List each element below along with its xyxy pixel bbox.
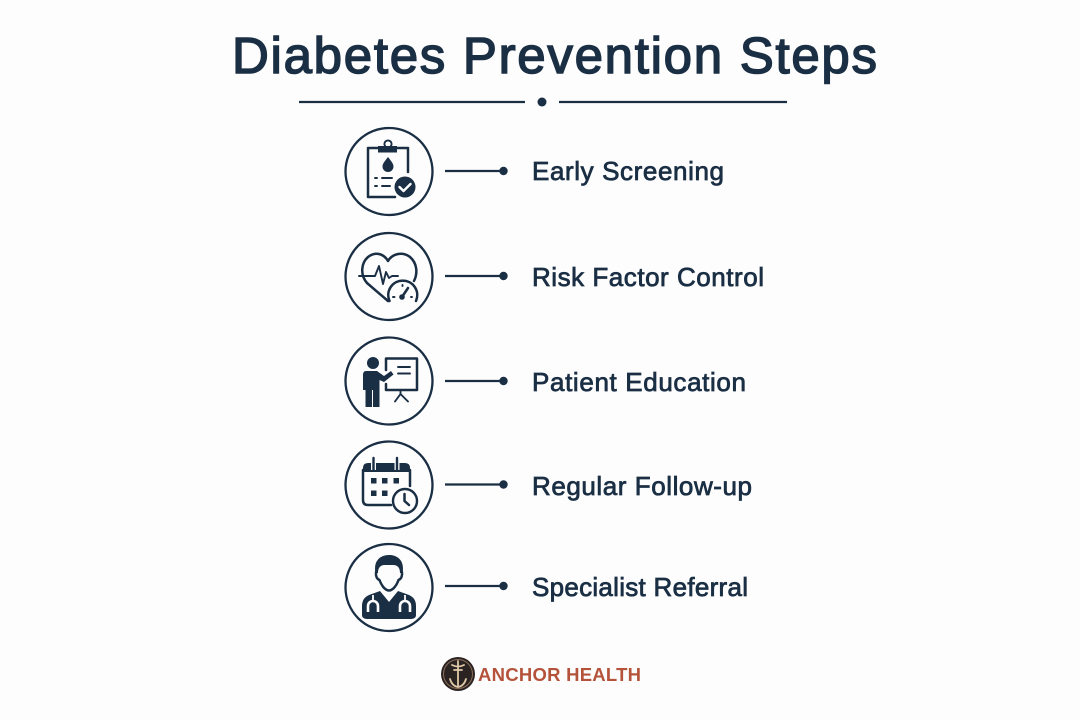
icon: clipboard with blood drop and check: [346, 128, 432, 215]
brand logo: [441, 657, 641, 691]
step 4: regular follow-up: [346, 442, 752, 528]
label: Risk Factor Control: [532, 262, 764, 292]
title: Diabetes Prevention Steps: [232, 27, 877, 84]
connector: [445, 272, 508, 280]
connector: [445, 377, 508, 385]
connector: [445, 480, 508, 489]
label: Early Screening: [532, 156, 724, 186]
icon: calendar with clock: [346, 442, 432, 528]
title divider: [299, 98, 787, 106]
step 2: risk factor control: [346, 233, 764, 320]
label: Regular Follow-up: [532, 471, 752, 501]
connector: [445, 167, 508, 175]
icon: heart with pulse and gauge: [346, 233, 432, 320]
step 3: patient education: [346, 338, 746, 424]
step 5: specialist referral: [346, 544, 748, 631]
icon: anchor and caduceus emblem: [441, 657, 475, 691]
label: Patient Education: [532, 367, 746, 397]
step 1: early screening: [346, 128, 724, 215]
icon: doctor with stethoscope: [346, 544, 432, 631]
icon: presenter at board: [346, 338, 432, 424]
brand name: ANCHOR HEALTH: [478, 664, 641, 685]
label: Specialist Referral: [532, 572, 748, 602]
connector: [445, 582, 508, 590]
